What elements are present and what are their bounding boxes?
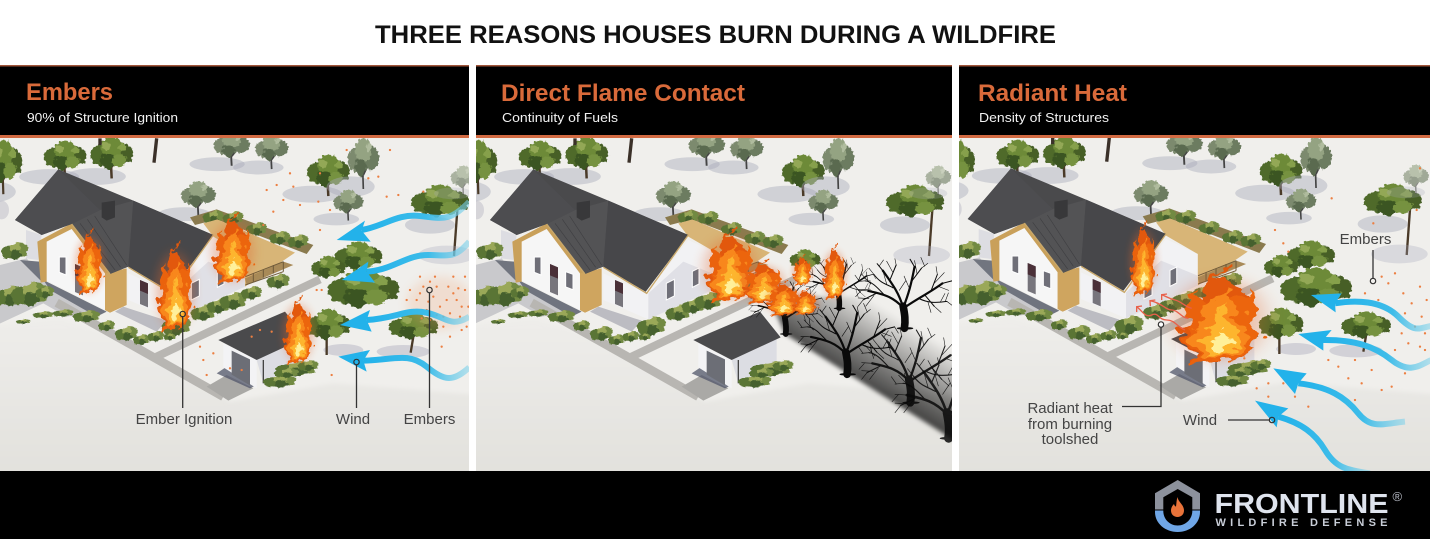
label: radiant heat from burning toolshed: from burning xyxy=(1028,416,1112,433)
flames spreading to house xyxy=(697,232,849,316)
label: wind: Wind xyxy=(1183,412,1217,429)
flames on house and shed xyxy=(71,217,318,363)
bare charred trees xyxy=(748,257,1008,440)
panel 1 header: 90% of Structure Ignition xyxy=(27,110,178,125)
label: embers: Embers xyxy=(404,411,455,428)
wind arrows xyxy=(337,202,469,378)
tagline: WILDFIRE DEFENSE xyxy=(1216,517,1388,529)
label: ember ignition xyxy=(136,311,232,428)
logo: Frontline Wildfire Defense xyxy=(1155,480,1402,532)
wind arrows xyxy=(1255,293,1430,473)
wordmark: FRONTLINE xyxy=(1214,488,1388,519)
label: wind: Wind xyxy=(336,411,370,428)
label: embers: Embers xyxy=(1340,231,1391,248)
flames on house and toolshed xyxy=(1126,225,1275,363)
title: THREE REASONS HOUSES BURN DURING A WILDFIRE xyxy=(375,21,1056,49)
panel 1 header xyxy=(0,65,469,138)
panel: embers xyxy=(0,65,469,471)
scattered embers xyxy=(407,277,473,330)
label: wind xyxy=(336,359,370,428)
label: radiant heat from burning toolshed xyxy=(1027,322,1164,448)
illustration: fire spreading through trees xyxy=(476,138,952,471)
illustration: burning toolshed heating house xyxy=(959,138,1430,471)
illustration: house with ember ignition xyxy=(0,138,469,471)
label: radiant heat from burning toolshed: Radiant heat xyxy=(1027,400,1113,417)
scattered embers xyxy=(1244,168,1427,407)
label: embers xyxy=(1340,231,1391,284)
label: embers xyxy=(404,287,455,428)
panel 3 header: Density of Structures xyxy=(979,110,1110,125)
shaded burning tree band xyxy=(768,297,962,445)
panel 3 header xyxy=(959,65,1430,138)
footer band xyxy=(0,471,1430,539)
label: radiant heat from burning toolshed: toolshed xyxy=(1042,431,1098,448)
icon: shield with flame xyxy=(1155,480,1200,532)
panel 2 header: Continuity of Fuels xyxy=(502,110,619,125)
panel 1 header: Embers xyxy=(26,79,113,106)
panel 2 header xyxy=(476,65,952,138)
panel: direct flame contact xyxy=(476,65,952,471)
label: ember ignition: Ember Ignition xyxy=(136,411,232,428)
radiant heat arrows xyxy=(1137,294,1192,330)
panel 3 header: Radiant Heat xyxy=(978,80,1127,107)
registered mark: ® xyxy=(1392,489,1402,504)
panel 2 header: Direct Flame Contact xyxy=(501,80,745,107)
label: wind xyxy=(1183,412,1275,429)
panel: radiant heat xyxy=(959,65,1430,471)
